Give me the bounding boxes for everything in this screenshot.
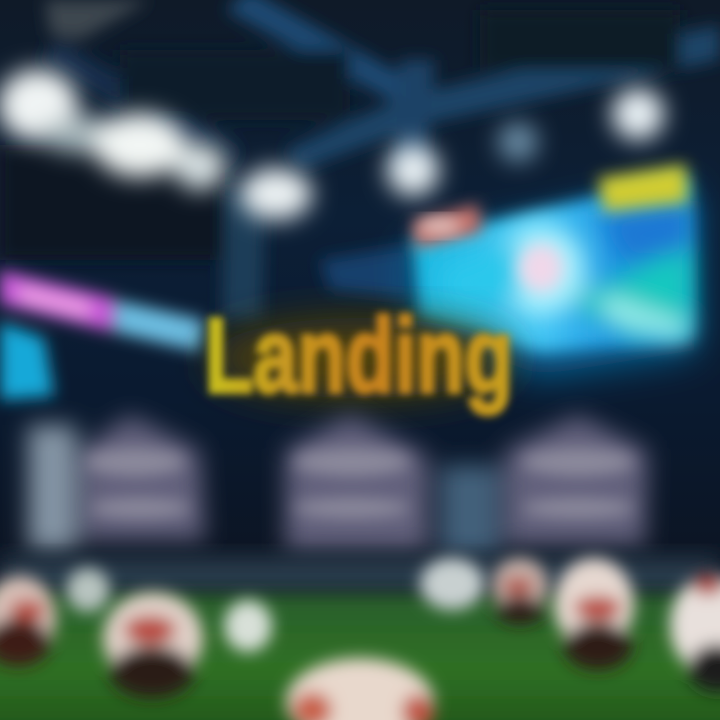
ceiling lights [0,69,664,220]
ball right [554,558,634,670]
ball bottom centre [286,658,434,720]
yellow banner on screen [598,164,688,212]
pitch [0,594,720,720]
left neon strip [0,270,204,400]
screen highlights [440,200,690,342]
balls [0,558,720,720]
roof structure [0,0,720,320]
seating blocks [28,415,648,555]
large screen [410,164,695,375]
ball left [103,592,203,698]
heading: Landing [205,297,513,415]
heading glow [210,318,510,398]
screen panel [412,175,692,352]
small balls [66,558,484,652]
ball far right [670,575,720,692]
screen glow [410,190,695,375]
ball centre right [492,558,548,624]
seating highlights [85,448,634,518]
red banner on screen [412,204,482,248]
ball far left [0,576,56,666]
lower crowd band [0,558,720,594]
